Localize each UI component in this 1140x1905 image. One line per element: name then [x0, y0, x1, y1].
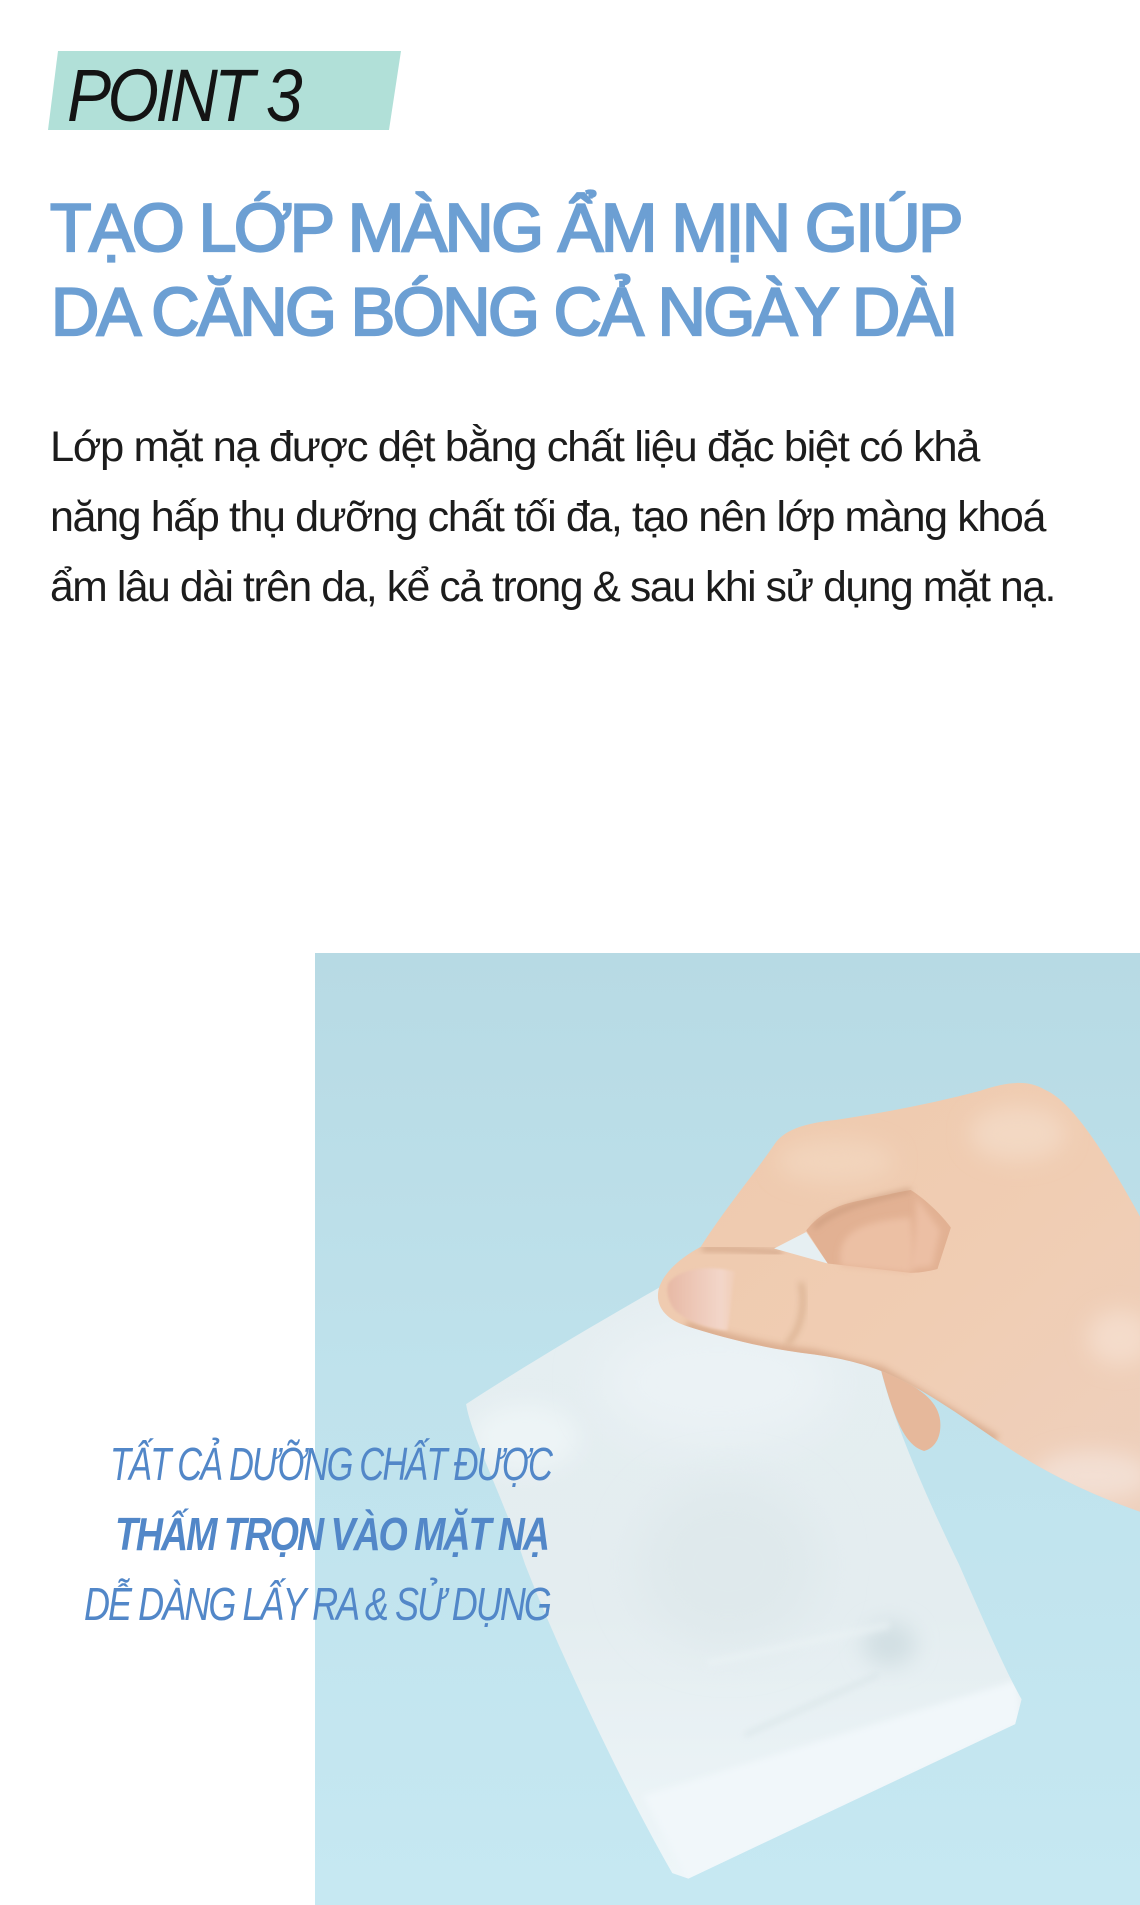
heading [50, 189, 961, 350]
body text [50, 423, 1055, 611]
caption [84, 1437, 553, 1630]
photo subject [466, 1083, 1140, 1881]
sheet mask [466, 1287, 1022, 1881]
inner shadow [840, 1218, 914, 1273]
heading: DA CĂNG BÓNG CẢ NGÀY DÀI [51, 273, 956, 350]
caption: TẤT CẢ DƯỠNG CHẤT ĐƯỢC [110, 1437, 553, 1490]
gap between fingers [806, 1190, 951, 1273]
badge: POINT 3: POINT 3 [67, 54, 302, 137]
caption: THẤM TRỌN VÀO MẶT NẠ [115, 1508, 548, 1560]
hand [658, 1083, 1140, 1512]
body text: năng hấp thụ dưỡng chất tối đa, tạo nên lớp màng khoá [50, 493, 1046, 541]
mask corner between fingers [774, 1232, 828, 1263]
body text: Lớp mặt nạ được dệt bằng chất liệu đặc biệt có khả [50, 423, 980, 471]
thumbnail [667, 1268, 735, 1330]
back finger [881, 1371, 940, 1451]
heading: TẠO LỚP MÀNG ẨM MỊN GIÚP [50, 189, 961, 266]
photo panel: hand holding sheet mask [315, 953, 1140, 1905]
body text: ẩm lâu dài trên da, kể cả trong & sau khi sử dụng mặt nạ. [50, 563, 1055, 611]
caption: DỄ DÀNG LẤY RA & SỬ DỤNG [84, 1577, 551, 1630]
photo background [315, 953, 1140, 1905]
